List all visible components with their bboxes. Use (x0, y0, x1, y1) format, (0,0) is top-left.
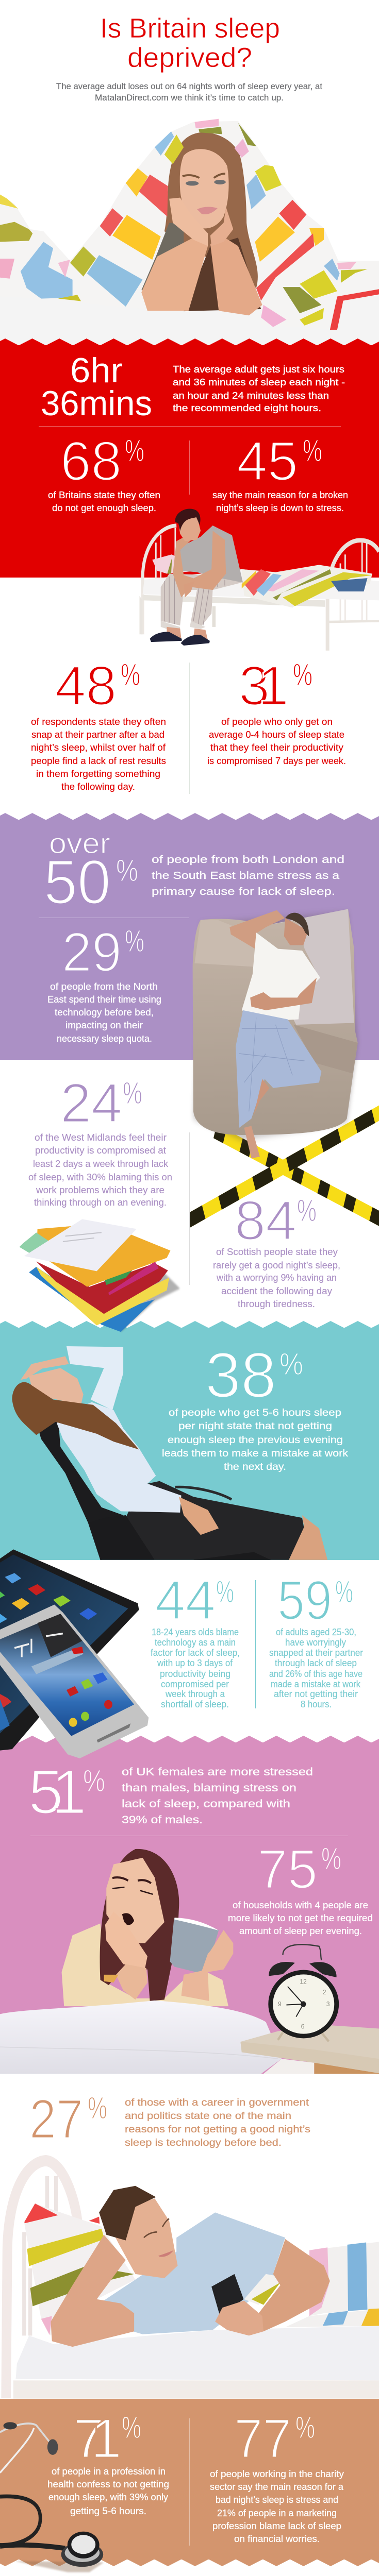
photo: yawning woman with mug, pillow, clock and table (0, 1849, 379, 2074)
stat: over 50%: 50 (44, 847, 111, 917)
text: 27% (125, 2097, 310, 2148)
text: 59% (269, 1627, 363, 1709)
photo: man sitting on bed (139, 509, 379, 651)
stat: 77%: 77 (234, 2407, 291, 2469)
stat: over 50%: % (116, 853, 138, 888)
text: 51%: 39% of males. (122, 1814, 203, 1826)
text: 71%: health confess to not getting (47, 2479, 169, 2489)
stat: 45%: % (303, 433, 322, 468)
photo: woman under striped duvet (0, 119, 379, 346)
stat: 6hr 36mins (41, 351, 152, 423)
stat: 75%: % (321, 1841, 341, 1876)
text: 68%: of Britains state they often (48, 490, 160, 500)
photo: yawning woman with mug, pillow, clock and table: 12 (300, 1977, 307, 1986)
stat: 77%: % (295, 2410, 315, 2445)
stat: 29%: % (125, 924, 144, 958)
intro text (56, 82, 322, 103)
text: average sleep: an hour and 24 minutes less than (173, 391, 329, 401)
stat: 59%: 59 (277, 1569, 332, 1631)
text: 51%: than males, blaming stress on (122, 1782, 296, 1794)
text: 68% (48, 490, 160, 513)
text: average sleep: The average adult gets just six hours (173, 364, 344, 375)
text: 44%: factor for lack of sleep, (151, 1648, 240, 1658)
photo: man in bed looking at phone (6, 2161, 379, 2399)
text: 44%: shortfall of sleep. (161, 1699, 229, 1709)
text: 38%: per night state that not getting (178, 1420, 332, 1432)
panel: purple stats on white (28, 1072, 340, 1309)
text: 44%: productivity being (160, 1669, 230, 1679)
panel: tan stats on white (29, 2088, 310, 2150)
text: 48%: snap at their partner after a bad (31, 730, 164, 740)
text: 84%: rarely get a good night’s sleep, (213, 1260, 340, 1270)
stat: 84%: 84 (235, 1189, 296, 1251)
stat: 29%: 29 (62, 921, 122, 983)
panel: tan section (0, 2399, 379, 2572)
text: 84%: accident the following day (221, 1286, 332, 1296)
stat: 31% (239, 654, 312, 717)
text: 71%: enough sleep, with 39% only (48, 2492, 168, 2502)
stat: 84%: % (297, 1193, 317, 1228)
stat: 6hr 36mins: 36mins (41, 384, 152, 423)
text: 44%: week through a (165, 1689, 225, 1699)
text: average sleep: the recommended eight hours. (173, 403, 321, 413)
text: 29%: impacting on their (65, 1020, 143, 1030)
pink section text (28, 1757, 373, 1936)
text: 24%: of sleep, with 30% blaming this on (28, 1172, 172, 1182)
stat: 31%: % (293, 657, 312, 692)
panel: pink section background (0, 1736, 379, 2074)
stat: over 50% (44, 827, 138, 917)
intro text: The average adult loses out on 64 nights worth of sleep every year, at (56, 82, 322, 91)
text: 50%: of people from both London and (152, 854, 344, 866)
stat: over 50%: over (49, 827, 110, 859)
text: 51%: of UK females are more stressed (122, 1766, 313, 1778)
text: 29% (47, 981, 161, 1044)
text: 77%: of people working in the charity (210, 2469, 344, 2479)
teal section text (162, 1340, 348, 1472)
text: average sleep: and 36 minutes of sleep each night - (173, 377, 345, 387)
text: 48%: people find a lack of rest results (31, 756, 166, 766)
stat: 44%: % (216, 1574, 234, 1609)
title: Is Britain sleep (100, 13, 280, 44)
stat: 48%: % (121, 657, 140, 692)
decorative tape (186, 1111, 379, 1222)
text: 77%: bad night’s sleep is stress and (216, 2495, 338, 2505)
panel: teal section background (0, 1321, 379, 1560)
text: 48%: night’s sleep, whilst over half of (31, 742, 166, 753)
text: 44% (151, 1627, 240, 1709)
text: 77%: profession blame lack of sleep (212, 2521, 341, 2531)
text: 75%: amount of sleep per evening. (239, 1926, 362, 1936)
text: 27%: of those with a career in government (125, 2097, 309, 2108)
photo: stack of folders (20, 1219, 180, 1332)
text: 59%: after not getting their (274, 1689, 358, 1699)
text: 75%: of households with 4 people are (233, 1900, 368, 1910)
text: 38%: enough sleep the previous evening (168, 1434, 343, 1446)
text: 77%: on financial worries. (234, 2534, 320, 2544)
stat: 6hr 36mins: 6hr (70, 351, 123, 390)
text: 44%: technology as a main (155, 1637, 236, 1648)
photo: tired woman in office chair (12, 1346, 327, 1560)
stat: 71%: 71 (73, 2407, 122, 2469)
text: 24% (28, 1132, 172, 1208)
text: 48%: the following day. (61, 782, 135, 792)
text: 27%: and politics state one of the main (125, 2111, 291, 2122)
text: 24%: thinking through on an evening. (34, 1197, 167, 1208)
stat: 27%: 27 (29, 2088, 83, 2150)
stat: 24%: % (123, 1076, 142, 1110)
hair (164, 132, 258, 288)
pillow (0, 2001, 282, 2074)
text: 31%: is compromised 7 days per week. (207, 756, 346, 766)
text: 59%: snapped at their partner (269, 1648, 363, 1658)
text: 75% (228, 1900, 373, 1936)
text: 71%: getting 5-6 hours. (70, 2506, 146, 2516)
text: 84% (213, 1247, 340, 1309)
text: 59%: through lack of sleep (275, 1658, 357, 1668)
text: 44%: with up to 3 days of (157, 1658, 233, 1668)
purple section text (39, 827, 344, 1044)
stat: 71%: % (122, 2410, 141, 2445)
stat: 45%: 45 (237, 430, 298, 492)
text: 59%: have worryingly (285, 1637, 346, 1648)
text: 38%: of people who get 5-6 hours sleep (169, 1407, 341, 1418)
stat: 68%: 68 (60, 430, 122, 492)
text: 24%: of the West Midlands feel their (35, 1132, 167, 1143)
table (263, 2059, 314, 2074)
text: 27%: reasons for not getting a good night’s (125, 2124, 310, 2135)
stat: 38%: % (279, 1347, 303, 1381)
text: 29%: technology before bed, (55, 1007, 154, 1018)
text: 84%: through tiredness. (238, 1299, 315, 1309)
text: 68%: do not get enough sleep. (52, 503, 156, 513)
section background (0, 2399, 379, 2566)
text: 44%: 18-24 years olds blame (152, 1627, 239, 1637)
text: 51% (122, 1766, 313, 1826)
text: 50%: primary cause for lack of sleep. (152, 886, 335, 897)
panel: red section background (0, 338, 379, 578)
text: 38% (162, 1407, 348, 1472)
stat: 59%: % (335, 1574, 353, 1609)
stat: 27%: % (88, 2091, 107, 2125)
intro text: MatalanDirect.com we think it’s time to catch up. (95, 93, 284, 103)
red section text (39, 351, 348, 513)
text: 59%: made a mistake at work (271, 1679, 361, 1689)
text: 29%: necessary sleep quota. (57, 1033, 152, 1044)
title (100, 13, 280, 73)
text: 50%: the South East blame stress as a (152, 870, 340, 882)
stat: 38%: 38 (205, 1340, 276, 1411)
photo: tablet and phone (0, 1549, 149, 1758)
stat: 31%: 31 (239, 654, 289, 717)
text: 50% (152, 854, 344, 897)
photo: yawning woman with mug, pillow, clock and table: 3 (326, 2000, 330, 2008)
text: 45% (212, 490, 348, 513)
text: 24%: productivity is compromised at (35, 1145, 166, 1156)
text: 29%: East spend their time using (47, 994, 161, 1005)
clock (283, 1944, 321, 1960)
text: 71%: of people in a profession in (52, 2466, 166, 2477)
text: 38%: the next day. (224, 1461, 286, 1472)
text: 71% (47, 2466, 169, 2516)
text: 31%: of people who only get on (221, 717, 333, 727)
text: 59%: of adults aged 25-30, (276, 1627, 356, 1637)
photo: man lying on bed from above (193, 909, 358, 1159)
text: 29%: of people from the North (50, 981, 158, 992)
photo: yawning woman with mug, pillow, clock and table: 6 (301, 2022, 304, 2030)
text: 45%: night’s sleep is down to stress. (216, 503, 344, 513)
stat: 44%: 44 (155, 1569, 216, 1631)
text: 27%: sleep is technology before bed. (125, 2138, 282, 2148)
stat: 51%: % (83, 1764, 105, 1798)
text: 84%: of Scottish people state they (216, 1247, 338, 1257)
stat: 68%: % (125, 433, 144, 468)
text: 38%: leads them to make a mistake at work (162, 1448, 348, 1459)
text: 48%: in them forgetting something (36, 769, 160, 779)
title: deprived? (127, 42, 252, 73)
text: 24%: least 2 days a week through lack (33, 1159, 169, 1169)
photo: yawning woman with mug, pillow, clock and table: 2 (323, 1988, 326, 1996)
text: 45%: say the main reason for a broken (212, 490, 348, 500)
text: 31% (207, 717, 346, 766)
text: 59%: and 26% of this age have (269, 1669, 362, 1679)
panel: header (0, 13, 379, 346)
text: 24%: work problems which they are (36, 1185, 164, 1195)
text: 48%: of respondents state they often (31, 717, 166, 727)
text: 84%: with a worrying 9% having an (216, 1273, 337, 1283)
text: 31%: average 0-4 hours of sleep state (209, 730, 344, 740)
photo: yawning woman with mug, pillow, clock and table: 9 (278, 2000, 282, 2008)
panel: red stats on white (31, 654, 346, 794)
text: 75%: more likely to not get the required (228, 1913, 373, 1923)
stat: 51%: 51 (28, 1757, 87, 1827)
icon: stethoscope (0, 2422, 104, 2572)
white stats beside phones (151, 1569, 363, 1709)
text: 44%: compromised per (161, 1679, 229, 1689)
man (161, 574, 242, 627)
text: average sleep (173, 364, 345, 413)
text: 48% (31, 717, 166, 792)
text: 59%: 8 hours. (301, 1699, 332, 1709)
stat: 48%: 48 (55, 654, 117, 717)
text: 77%: sector say the main reason for a (210, 2482, 344, 2492)
text: 77% (210, 2469, 344, 2544)
text: 77%: 21% of people in a marketing (217, 2508, 337, 2518)
text: 51%: lack of sleep, compared with (122, 1798, 290, 1810)
stat: 75%: 75 (257, 1838, 318, 1900)
panel: purple section background (0, 813, 379, 1060)
stat: 24%: 24 (60, 1072, 122, 1134)
text: 31%: that they feel their productivity (210, 742, 343, 753)
